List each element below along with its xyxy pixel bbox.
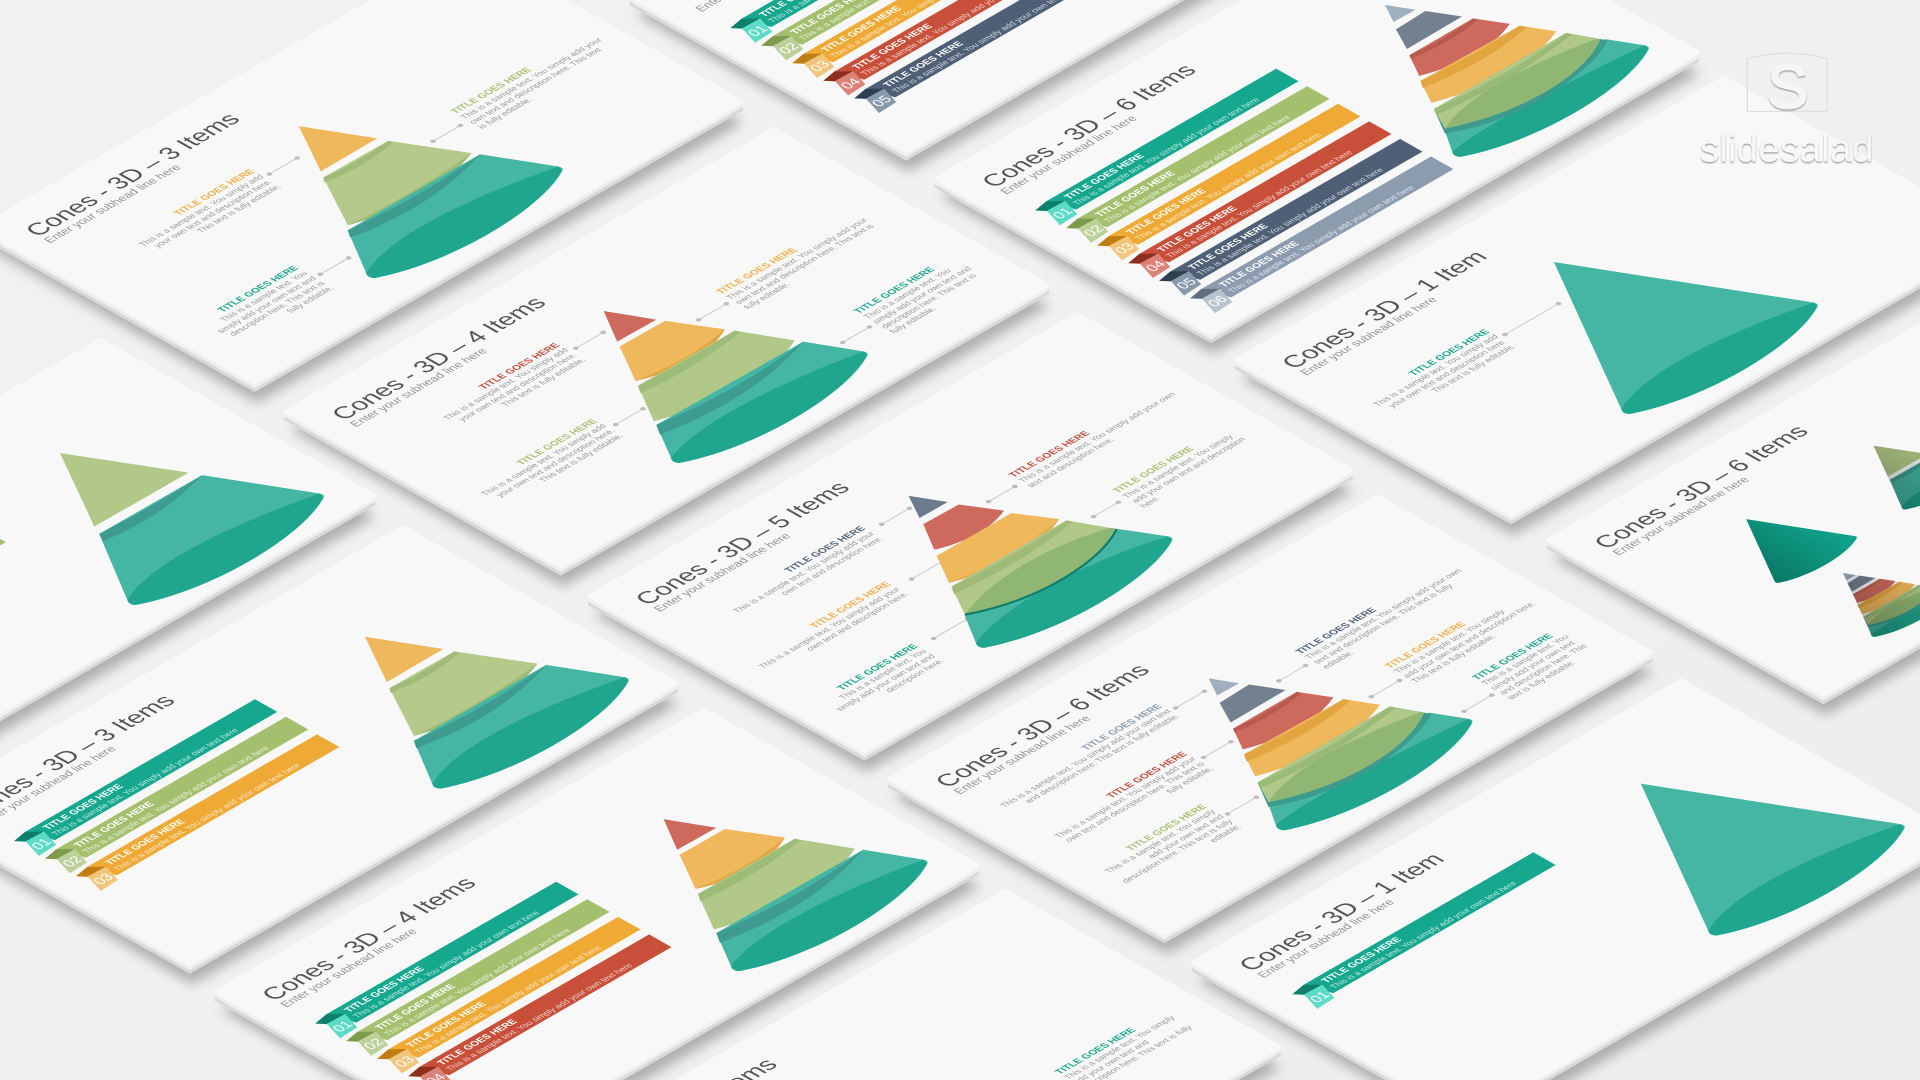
callout: teal: TITLE GOES HERE (216, 264, 302, 314)
callout: slate: TITLE GOES HERE (782, 525, 869, 574)
callout: green: add your own text and (1145, 813, 1226, 860)
slide: 3 items ribbons: 01 (27, 836, 55, 852)
slide: 5 items callouts: Cones - 3D – 5 Items (629, 478, 856, 609)
callout: teal: This is a sample text. You simply add (1371, 333, 1501, 408)
slide: 6 items ribbons (937, 0, 1700, 354)
slide: 6 items callouts: Cones - 3D – 6 Items (929, 661, 1156, 791)
callout: red: your own text and description here. (456, 351, 579, 423)
callout: yellow: add your own text and description here. (1400, 600, 1538, 679)
callout: teal: description here. This text is (878, 272, 979, 330)
callout: teal: TITLE GOES HERE (852, 266, 938, 315)
callout: teal: and description here. This (1496, 642, 1590, 696)
slide: 4 items ribbons (217, 710, 980, 1080)
slide: 3 items ribbons: TITLE GOES HERE (72, 800, 158, 849)
callout: slate (722, 501, 927, 619)
callout: teal: simply add your own text and (214, 275, 319, 335)
callout: red: fully editable. (1164, 765, 1215, 795)
callout: teal: simply add your own text and (870, 265, 974, 325)
slide: 6 items ribbons: This is a sample text. You simply add your own text here (1101, 114, 1293, 224)
watermark logo: S (1767, 53, 1808, 121)
callout: teal: fully editable. (284, 284, 336, 314)
slide: 3 items ribbons: This is a sample text. You simply add your own text here (111, 762, 303, 872)
callout: slate: text and description here. This text is fully (1311, 582, 1456, 665)
slide: 3 items ribbons: TITLE GOES HERE (103, 818, 189, 867)
slide: 4 items ribbons: 02 (360, 1036, 387, 1052)
slide: 6 items ribbons: 05 (1173, 276, 1200, 291)
slide: 3 items callouts: Enter your subhead line here (41, 163, 184, 245)
callout: green: is fully editable. (475, 96, 534, 130)
callout: yellow: your own text and description here. (151, 178, 275, 249)
callout: green: own text and description here. This text (467, 46, 604, 125)
slide: 4 items ribbons: This is a sample text. You simply add your own text here (381, 927, 573, 1037)
slide: 6 items ribbons: This is a sample text. You simply add your own text here (1225, 184, 1417, 294)
callout: pale slate (989, 682, 1218, 814)
slide: 6 items ribbons: 03 (1111, 240, 1138, 256)
callout: red (971, 385, 1187, 509)
callout: teal (1362, 293, 1579, 417)
slide: 5 items callouts (590, 315, 1353, 771)
callout: green: TITLE GOES HERE (1111, 445, 1197, 495)
small cone: teal (1746, 519, 1857, 583)
slide: 1 item ribbon: TITLE GOES HERE (1319, 936, 1405, 985)
callout: teal (196, 244, 372, 345)
callout: teal: This is a sample text. You simply (1061, 1014, 1177, 1080)
slide: 3 items callouts: Cones - 3D – 3 Items (19, 110, 247, 240)
watermark logo: slidesalad (1700, 129, 1873, 171)
slide: 4 items ribbons: Enter your subhead line here (278, 927, 420, 1009)
slide: 3 items ribbons: 03 (89, 871, 117, 887)
slide: 1 item callout: Enter your subhead line here (1298, 295, 1440, 377)
callout: teal: TITLE GOES HERE (1470, 632, 1557, 682)
slide: 5 items ribbons (top) (632, 0, 1395, 171)
callout: yellow: own text and description here. (804, 590, 911, 652)
callout: teal: TITLE GOES HERE (1407, 328, 1493, 378)
callout: green: TITLE GOES HERE (449, 66, 535, 116)
callout: teal: text is fully editable. (1505, 659, 1578, 701)
callout: teal: TITLE GOES HERE (1053, 1026, 1139, 1076)
callout: teal: This is a sample text. You (861, 267, 954, 320)
callout: yellow: This text is fully editable. (194, 183, 283, 234)
slide: 6 items partial (right): Cones - 3D – 6 Items (1588, 422, 1815, 553)
callout: yellow: TITLE GOES HERE (714, 246, 801, 296)
slide: 6 items partial (right) (1549, 258, 1920, 715)
callout: yellow: This text is fully editable. (1409, 633, 1498, 684)
slide: 6 items callouts (890, 497, 1653, 954)
callout: teal: This is a sample text. You (1479, 633, 1571, 686)
callout: yellow (679, 211, 887, 331)
slide: 2 items ribbons (left, cropped) (0, 340, 376, 797)
slide: 1 item ribbon: Enter your subhead line here (1255, 898, 1398, 980)
slide: 3 items ribbons (0, 528, 678, 984)
callout: green: your own text and description here. (493, 427, 617, 499)
callout: green: TITLE GOES HERE (1124, 803, 1210, 853)
small cone: six layers (1843, 573, 1920, 637)
slide: 1 item callout (1237, 78, 1920, 535)
slide: 6 items ribbons: This is a sample text. You simply add your own text here (1163, 149, 1355, 259)
slide: 4 items callouts: Cones - 3D – 4 Items (326, 293, 553, 424)
callout: red (1043, 731, 1250, 849)
slide: 5 items ribbons (top): TITLE GOES HERE (881, 40, 967, 89)
callout: yellow: This is a sample text. You simply add your (723, 216, 870, 301)
callout: slate: TITLE GOES HERE (1294, 606, 1380, 656)
callout: yellow: This is a sample text. You simply add (136, 173, 266, 248)
callout: pale slate: TITLE GOES HERE (1079, 702, 1166, 752)
callout: green: editable. (1207, 823, 1244, 844)
callout: green: description here. This text is fully (1119, 817, 1236, 884)
callout: green: This is a sample text. You simply (1120, 433, 1236, 499)
slide: 6 items ribbons: This is a sample text. You simply add your own text here (1070, 96, 1262, 206)
slide: 4 items ribbons: 01 (329, 1018, 356, 1034)
slide: 5 items ribbons (top): TITLE GOES HERE (850, 22, 936, 71)
callout: red: This text is fully editable. (499, 356, 588, 408)
callout: teal: your own text and description here. (1386, 338, 1509, 409)
callout: pale slate: and description here. This text is fully editable. (1022, 712, 1182, 805)
slide: 2 items callouts (bottom, cropped) (518, 891, 1281, 1080)
slide: 3 items ribbons: This is a sample text. You simply add your own text here (80, 744, 272, 855)
slide: 6 items ribbons: TITLE GOES HERE (1093, 169, 1179, 219)
callout: yellow: TITLE GOES HERE (172, 168, 258, 217)
callout: teal: TITLE GOES HERE (835, 642, 921, 692)
callout: green (1076, 426, 1257, 529)
callout: green (1093, 783, 1278, 889)
slide: 1 item callout: Cones - 3D – 1 Item (1276, 247, 1494, 373)
callout: red: TITLE GOES HERE (1104, 750, 1191, 800)
slide: 6 items ribbons: TITLE GOES HERE (1062, 152, 1148, 201)
callout: green: This text is fully editable. (536, 432, 626, 484)
callout: slate: own text and description here. (778, 535, 885, 597)
callout: yellow (127, 148, 318, 258)
slide: 1 item ribbon: Cones - 3D – 1 Item (1233, 850, 1451, 975)
slide: 4 items ribbons: Cones - 3D – 4 Items (256, 874, 483, 1004)
callout: teal: This is a sample text. You (836, 647, 929, 701)
callout: red: TITLE GOES HERE (477, 341, 563, 391)
callout: green (470, 397, 661, 507)
callout: teal (1435, 628, 1598, 721)
callout: green: here. (1137, 495, 1163, 509)
callout: green: This is a sample text. You simply (1102, 808, 1218, 874)
callout: slate: This is a sample text. You simply add your own (1302, 567, 1464, 660)
slide: 5 items callouts: Enter your subhead line here (651, 531, 794, 614)
slide: 4 items ribbons: TITLE GOES HERE (342, 965, 428, 1014)
callout: green: This is a sample text. You simply add your (458, 36, 604, 120)
slide: 4 items ribbons: 03 (391, 1053, 418, 1069)
callout: teal (816, 613, 997, 717)
callout: teal (817, 255, 991, 355)
callout: yellow: fully editable. (741, 281, 793, 310)
small cone: two layers (1873, 446, 1920, 509)
slide: 3 items ribbons: This is a sample text. You simply add your own text here (49, 727, 241, 837)
slide: 1 item ribbon (1194, 681, 1920, 1080)
callout: yellow: This is a sample text. You simply add your (756, 586, 902, 670)
slide: 3 items callouts (0, 0, 743, 403)
slide: 5 items ribbons (top): 03 (806, 58, 833, 74)
slide: 6 items callouts: Enter your subhead line here (951, 714, 1094, 796)
callout: slate: This is a sample text. You simply add your (731, 530, 877, 614)
callout: yellow: This is a sample text. You simply (1392, 608, 1508, 674)
slide: 6 items ribbons: This is a sample text. You simply add your own text here (1194, 166, 1386, 277)
slide: 6 items ribbons: 02 (1080, 223, 1107, 239)
callout: teal: This text is fully editable. (1429, 343, 1518, 394)
callout: red: own text and description here. This text is (1062, 760, 1207, 843)
slide: 6 items ribbons: TITLE GOES HERE (1155, 205, 1241, 254)
slide: 6 items ribbons: This is a sample text. You simply add your own text here (1132, 131, 1324, 242)
callout: green: This is a sample text. You simply add (479, 422, 609, 497)
callout: red: This is a sample text. You simply add (441, 346, 571, 421)
callout: yellow: TITLE GOES HERE (808, 580, 894, 630)
callout: teal: simply add your own text and (833, 652, 938, 713)
slide: 4 items ribbons: TITLE GOES HERE (435, 1018, 521, 1067)
callout: yellow (1347, 590, 1547, 705)
slide: 3 items ribbons: TITLE GOES HERE (41, 782, 127, 832)
slide: 4 items callouts: Enter your subhead line here (347, 347, 490, 429)
slide: 6 items ribbons: TITLE GOES HERE (1124, 187, 1210, 236)
slide: 5 items ribbons (top): 01 (744, 23, 771, 39)
slide: 4 items callouts (287, 130, 1049, 587)
slide: 5 items ribbons (top): 04 (837, 75, 864, 91)
slide: 6 items ribbons: Enter your subhead line here (998, 114, 1140, 196)
slide: 4 items ribbons: TITLE GOES HERE (373, 983, 459, 1032)
slide: 1 item ribbon: This is a sample text. You simply add your own text here (1327, 880, 1519, 990)
slide: 4 items ribbons: This is a sample text. You simply add your own text here (443, 962, 635, 1072)
callout: teal: simply add your own text (1487, 639, 1578, 691)
callout: yellow: TITLE GOES HERE (1383, 620, 1469, 670)
callout: pale slate: This is a sample text. You simply add your own text (998, 707, 1174, 809)
slide: 6 items ribbons: TITLE GOES HERE (1217, 240, 1303, 289)
callout: teal: description here. (883, 657, 946, 694)
slide: 6 items partial (right): Enter your subhead line here (1610, 475, 1753, 557)
callout: red: TITLE GOES HERE (1007, 429, 1093, 479)
slide: 6 items ribbons: 01 (1049, 205, 1076, 221)
callout: teal: fully editable. (887, 305, 939, 335)
callout: red: This is a sample text. You simply add your (1052, 755, 1198, 840)
callout: yellow: own text and description here. This text is (732, 222, 876, 306)
slide: 6 items ribbons: TITLE GOES HERE (1186, 222, 1272, 271)
callout: green: add your own text and description (1129, 436, 1248, 504)
slide: 3 items ribbons: 02 (58, 853, 86, 869)
callout: teal: description here. This text is (227, 280, 327, 337)
slide: 1 item ribbon: 01 (1306, 989, 1333, 1005)
callout: slate: editable. (1320, 649, 1356, 670)
callout: red (432, 322, 623, 431)
callout: yellow (747, 553, 959, 675)
slide: 6 items ribbons: 04 (1142, 258, 1169, 274)
callout: green: TITLE GOES HERE (515, 417, 601, 467)
watermark logo (1700, 53, 1873, 171)
slide: 4 items ribbons: This is a sample text. You simply add your own text here (350, 909, 542, 1019)
slide: 5 items ribbons (top): 05 (868, 93, 895, 109)
slide: 6 items ribbons: 06 (1204, 293, 1231, 309)
slide: 5 items ribbons (top): 02 (775, 40, 802, 56)
callout: teal: This is a sample text. You (217, 270, 310, 323)
callout: red: text and description here. (1025, 436, 1116, 489)
slide: 4 items ribbons: TITLE GOES HERE (404, 1000, 490, 1049)
slide: 6 items ribbons: Cones - 3D – 6 Items (976, 61, 1203, 191)
slide: 5 items ribbons (top): TITLE GOES HERE (819, 5, 905, 54)
slide: 4 items ribbons: This is a sample text. You simply add your own text here (412, 944, 604, 1055)
callout: green (412, 31, 621, 151)
callout: slate (1258, 562, 1482, 691)
callout: red: This is a sample text. You simply add your own (1016, 391, 1178, 484)
